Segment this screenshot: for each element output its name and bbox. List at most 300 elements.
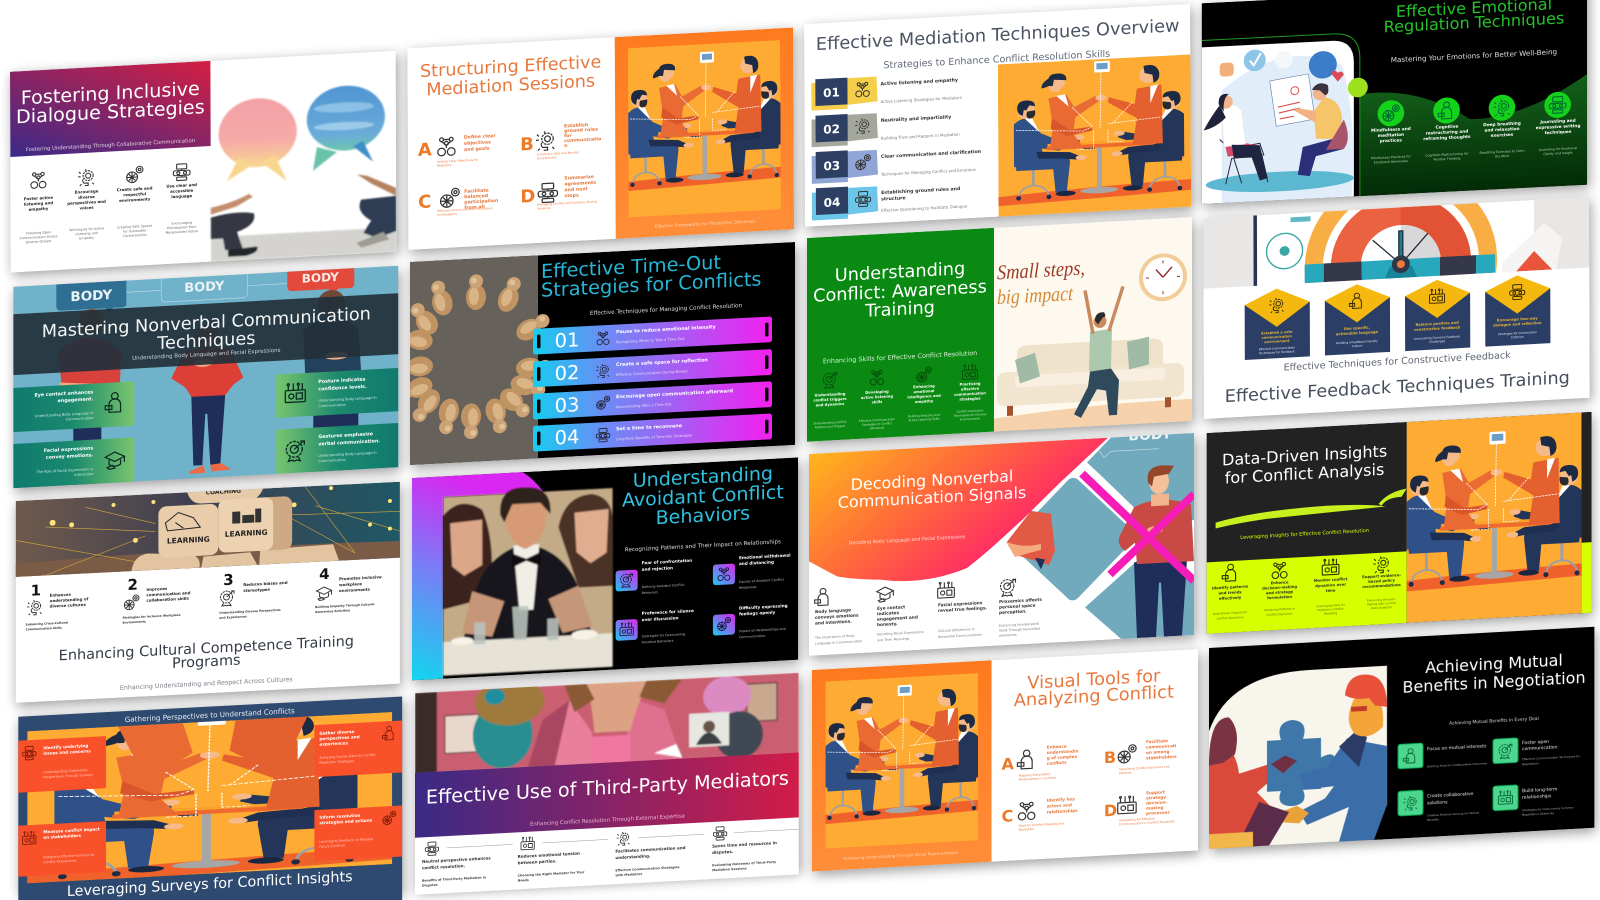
point labels: engagement and (877, 614, 918, 623)
lime brush swoosh (1216, 489, 1407, 529)
callout: eye contact: Communication (66, 416, 93, 421)
icon: summarize (538, 183, 558, 203)
panel: Effective Mediation Techniques Overview (804, 2, 1227, 227)
handwritten slogan (997, 256, 1085, 309)
point details: Conversations (123, 233, 147, 238)
card 3: Balance positive and (1415, 321, 1459, 327)
point details: Mediation Sessions (712, 866, 747, 872)
icon: communication (617, 832, 629, 845)
letter markers: D (520, 186, 535, 208)
letter markers: C (1002, 806, 1013, 826)
point details (20, 220, 198, 245)
point labels: collaboration skills (146, 596, 189, 603)
photo: wooden learning blocks (16, 472, 400, 577)
figure: central man (1119, 464, 1194, 639)
title: Mediation Sessions (426, 72, 595, 100)
point details: Conflict Resolution (957, 408, 984, 414)
point details: Making with Conflict (1367, 601, 1397, 606)
point labels: empathy (29, 206, 49, 212)
point details: Communication Across (20, 234, 58, 240)
callout: inform strategies (314, 805, 402, 861)
subtitle: Achieving Mutual Benefits in Every Deal (1449, 716, 1539, 727)
photo: wooden pawns in a circle (395, 255, 554, 466)
point labels: communication (954, 391, 986, 397)
point labels: emotional (914, 389, 934, 394)
step 03: 03 (823, 159, 840, 173)
point details: Evaluating Outcomes of Third-Party (712, 860, 776, 867)
subtitle: Fostering Understanding Through Collaborative Communication (26, 138, 195, 153)
point labels: Journaling and (1539, 118, 1576, 125)
step bar 02: Effective Communication During Breaks (616, 369, 688, 377)
panel: Effective Time-Out Strategies for Conflicts (395, 242, 795, 466)
point labels: strategy (1146, 794, 1166, 800)
point labels: perspectives and (67, 199, 106, 206)
callout: posture: Posture indicates (318, 377, 366, 385)
title: Training (864, 298, 935, 322)
point labels: Focus on mutual interests (1427, 743, 1487, 753)
card 3: constructive feedback (1414, 325, 1461, 332)
illustration: counselling session (1202, 40, 1354, 204)
figure: right person (303, 288, 361, 472)
callout: posture (276, 368, 398, 418)
point labels (1047, 738, 1177, 821)
speech bubble: BODY middle (161, 268, 247, 302)
point details: Mapping Stakeholder (1019, 772, 1051, 778)
point details: for Vulnerable (123, 228, 146, 234)
icon: perspectives (78, 169, 94, 186)
title: Leveraging Surveys for Conflict Insights (67, 869, 353, 900)
card 4: Strategies for Constructive (1498, 330, 1537, 336)
panel: Fostering Inclusive Dialogue Strategies (10, 51, 396, 273)
icon tile: solutions (1398, 790, 1423, 816)
point labels: Deep breathing (1483, 120, 1521, 128)
point details: Empathy (79, 236, 94, 240)
point details: Positive Thinking (1433, 156, 1460, 162)
point labels: exercises (1491, 132, 1514, 139)
point labels: active listening (861, 394, 893, 400)
point labels: Identify key (1047, 796, 1075, 803)
step details: Building Trust and Rapport in Mediation (881, 132, 960, 141)
step bar 02 (533, 349, 772, 387)
point details: Sessions (537, 206, 551, 211)
title: Visual Tools for (1027, 667, 1161, 694)
photo: wooden learning blocks: LEARNING (167, 535, 210, 546)
icon: strategies (962, 364, 978, 379)
point labels: Promotes inclusive (339, 574, 382, 581)
handwritten slogan: Small steps, (997, 256, 1085, 284)
point labels (422, 840, 777, 870)
point labels: understanding. (615, 853, 651, 860)
point details: Defining Avoidant Conflict (642, 583, 685, 589)
point labels: Difficulty expressing (739, 603, 788, 611)
title: Strategies for Conflicts (541, 267, 761, 302)
header band (10, 61, 211, 157)
card 1: Establish a safe (1261, 330, 1293, 336)
speech bubble: BODY right (287, 260, 354, 298)
icon circle: mindfulness (1378, 100, 1404, 127)
point details: Integrating Art Effective (1119, 816, 1155, 822)
point labels: Reduces emotional tension (518, 851, 580, 859)
title: Effective Mediation Techniques Overview (816, 16, 1180, 55)
icon: proxemics (1000, 579, 1016, 596)
illustration: handshake with puzzle piece (1209, 666, 1387, 849)
illustration: zoomed mediation meeting (0, 700, 433, 889)
point labels: Enhance (1047, 744, 1067, 750)
point labels: Define clear (464, 133, 496, 141)
point labels: g of complex (1047, 754, 1077, 760)
numbers: 3 (223, 571, 234, 589)
point details: Environments (960, 416, 980, 422)
callout: gather perspectives: Analyzing Survey Data for Conflict (319, 753, 376, 760)
teal rounded diamond: centre (1008, 475, 1138, 603)
point labels: conflict resolution. (422, 863, 466, 870)
point labels: Emotional withdrawal (739, 553, 791, 560)
point labels: Saves time and resources in (712, 840, 777, 849)
green outline (1202, 33, 1360, 204)
step 02 (811, 112, 878, 147)
point details (814, 622, 1040, 648)
point labels: personal space (999, 603, 1036, 611)
callout: posture: Communication (318, 403, 346, 408)
point labels: recommendations (1362, 583, 1402, 589)
point details: Environments (122, 620, 146, 625)
callout: inform strategies: strategies and actions (319, 818, 373, 825)
point labels: communication (1522, 744, 1558, 752)
point labels: Reduces biases and (243, 580, 288, 587)
title: Data-Driven Insights (1222, 442, 1387, 469)
illustration: sofa and dancing person (994, 283, 1192, 432)
icon: clear language (173, 164, 190, 181)
letter markers (418, 137, 534, 208)
callout: identify issues: issues and concerns (43, 748, 91, 756)
step details: Effective Questioning to Facilitate Dialogue (881, 203, 968, 213)
panel: Leveraging Surveys for Conflict Insights (0, 695, 433, 900)
point labels: based policy (1368, 578, 1396, 584)
point details: Creating Safe Spaces (117, 224, 153, 230)
card 1: environment (1264, 339, 1290, 344)
point labels: stakeholders (1146, 754, 1177, 760)
callout: gestures: Understanding Body Language in (318, 451, 377, 458)
point details: Strategies for Overcoming Common (1522, 805, 1574, 812)
point details: Active Listening Skills (908, 417, 940, 422)
step labels: Active listening and empathy (881, 77, 958, 87)
title: Understanding (835, 259, 965, 286)
point details: Strategies in Conflict (862, 421, 893, 427)
point labels: communicati (1146, 743, 1177, 750)
step labels: Establishing ground rules and (881, 186, 960, 196)
point details: Responses (739, 585, 757, 590)
speech bubble outline with cropped BODY label (1094, 426, 1173, 458)
icon: objectives (438, 137, 455, 156)
icon: listening (870, 370, 884, 385)
point labels: conflicts (1047, 760, 1067, 766)
icon: listening (31, 172, 46, 189)
point labels: from all (464, 204, 485, 211)
point details: Skills Through Nonverbal (999, 627, 1040, 633)
callout: eye contact (13, 381, 134, 432)
caption: Effective Frameworks for Productive Outcomes (654, 218, 756, 230)
step bar 04: Long-Term Benefits of Time-Out Strategies (616, 433, 692, 441)
point labels (813, 381, 986, 410)
point details: Benefits of Third-Party Mediation in (422, 875, 486, 883)
point labels: Establish (564, 122, 588, 129)
letter markers: A (418, 139, 432, 161)
step labels: Neutrality and impartiality (881, 114, 951, 124)
callout: gather perspectives: experiences (319, 740, 348, 747)
point labels: honesty. (877, 621, 898, 628)
callout: gestures (276, 423, 398, 474)
point details: Creative Problem-Solving for Mutual (1427, 810, 1479, 817)
point details (1018, 764, 1175, 832)
point labels: practices (1380, 137, 1402, 144)
panel: Effective Feedback Techniques Training (1203, 160, 1590, 419)
point details: Setting Clear Objectives for (437, 158, 479, 164)
point details (1213, 597, 1397, 622)
point labels: reframing thoughts (1423, 134, 1471, 142)
point details: Conflict Dynamics (1267, 611, 1293, 617)
figure: centre person (171, 322, 243, 475)
point labels: steps (564, 193, 579, 199)
letter markers: B (1104, 748, 1116, 767)
point details: Awareness (999, 633, 1017, 638)
speech bubble: BODY left (56, 281, 126, 316)
point labels: Facilitates communication and (615, 845, 686, 854)
point details: Building Empathy Through Cultural (315, 602, 374, 609)
point labels: over discussion (642, 615, 678, 622)
icon circle: cognitive (1433, 97, 1460, 124)
numbers: 2 (127, 576, 138, 594)
callout: facial expressions (13, 437, 134, 488)
lime accent (1348, 77, 1368, 98)
point details: Resolution (1019, 827, 1034, 832)
callout: identify issues: Perspectives Through Surveys (43, 773, 93, 779)
point labels: Eye contact (877, 604, 905, 612)
callout: eye contact: Understanding Body Language in (35, 411, 93, 418)
panel: Decoding Nonverbal Communication Signals (809, 425, 1194, 656)
point labels: Enhancing (913, 384, 935, 389)
point labels: understandin (1047, 748, 1078, 755)
callout: inform strategies: Future Conflicts (319, 843, 345, 849)
title: Enhancing Cultural Competence Training (59, 634, 354, 664)
subtitle: Effective Techniques for Constructive Feedback (1284, 350, 1511, 373)
icon: collaboration (124, 595, 139, 610)
point details: Avoidant Behaviors (642, 639, 674, 644)
point details: Communication in Conflict Resolution (1119, 819, 1175, 826)
point labels: Neutral perspective enhances (422, 855, 491, 864)
point labels: for (564, 133, 572, 139)
callout: measure impact: Conflict Assessment (43, 859, 77, 864)
callout: facial expressions: Interaction (74, 472, 93, 477)
step bar 03: Reconnecting After a Time-Out (616, 402, 672, 409)
icon: figures (1018, 802, 1035, 820)
icon: wall clock (1139, 252, 1187, 302)
point labels: Facial expressions (938, 600, 983, 609)
photo: wooden learning blocks: COACHING (206, 488, 241, 496)
panel: Enhancing Cultural Competence Training Programs (16, 472, 400, 703)
step bar 04 (533, 413, 772, 452)
card 2: Culture (1352, 344, 1363, 348)
point labels: environments (339, 587, 371, 593)
illustration: mediation meeting (628, 40, 781, 218)
point labels: environments (119, 196, 151, 203)
point labels: conflict triggers (813, 397, 847, 403)
point labels: and goals (464, 146, 490, 153)
callout: posture: confidence levels. (318, 384, 367, 392)
point labels: voices (79, 205, 94, 211)
figure: left person (58, 307, 121, 486)
handwritten slogan: big impact (997, 281, 1074, 309)
step details (880, 94, 976, 213)
point details: Understanding Conflict (813, 420, 847, 426)
point labels: understanding of (50, 596, 89, 603)
icon: inclusive workplace (317, 587, 332, 601)
point labels: feelings openly (739, 610, 776, 617)
title: Decoding Nonverbal (851, 466, 1013, 494)
point details (422, 860, 776, 888)
teal panel: top right (1087, 433, 1194, 535)
point labels: Summarize (564, 174, 594, 182)
card 3: Challenges (1429, 339, 1446, 344)
step 03 (812, 149, 878, 184)
point labels: on among (1146, 749, 1170, 755)
icon circle: journaling (1544, 91, 1571, 119)
point labels (24, 182, 197, 214)
point details: Negotiation Obstacles (1522, 811, 1554, 817)
point details: Tools for Conflict Mapping and (1018, 821, 1064, 828)
point labels (1212, 573, 1402, 603)
point labels: Developing (865, 390, 889, 395)
panel: Effective Use of Third-Party Mediators (415, 663, 799, 895)
point labels: Foster open (1522, 739, 1549, 746)
card 4: dialogue and reflection (1493, 321, 1542, 328)
point labels: Create safe and (117, 185, 153, 192)
speech bubble: BODY right: BODY (302, 270, 339, 286)
point details: Communication Skills (26, 626, 62, 632)
icon: understanding (27, 600, 41, 615)
photo: woman in pink blazer among decor (415, 663, 799, 776)
point labels: Understanding (815, 392, 846, 398)
dark green wave (1360, 74, 1587, 196)
step bar 03: Encourage open communication afterward (616, 388, 734, 400)
point labels: Facilitate (1146, 738, 1168, 744)
point labels: Enhance (1271, 580, 1289, 585)
point details: Techniques for Diverse (953, 412, 987, 418)
step bar 01 (533, 316, 772, 355)
point labels: reveal true feelings. (938, 605, 988, 614)
point details: Conflict Resolution (1217, 615, 1244, 621)
step 04 (812, 185, 878, 220)
point details: Analyzing Patterns in (1264, 606, 1295, 612)
point labels: and trends (1219, 590, 1242, 596)
point details: Cognitive Restructuring for (1425, 151, 1469, 158)
lime lower band (1207, 551, 1407, 634)
point labels: meditation (1378, 132, 1404, 139)
point labels: Support evidence- (1362, 573, 1402, 579)
point labels: Build long-term (1522, 787, 1558, 794)
point details: Situations (870, 426, 885, 430)
green block (807, 228, 994, 442)
step bar 01: 01 (555, 328, 579, 353)
point labels: intelligence and (907, 394, 941, 400)
point labels: Identify patterns (1212, 585, 1249, 590)
title: Achieving Mutual (1425, 651, 1563, 677)
teal panel: bottom right (1085, 539, 1194, 641)
icon: biases (221, 591, 234, 606)
point details: Marginalized Voices (166, 229, 198, 235)
point labels: language (171, 193, 193, 199)
card 1: Techniques for Feedback (1258, 349, 1295, 355)
point labels: Create collaborative (1427, 791, 1474, 800)
point labels: Support (1146, 789, 1165, 795)
point details: Building Empathy and (908, 413, 940, 418)
title: Structuring Effective (420, 53, 601, 82)
numbers: 4 (319, 565, 330, 583)
point labels: communicatio (564, 136, 601, 144)
point labels: stereotypes (243, 587, 271, 593)
point details: Strategies for Inclusive Workplace (122, 613, 181, 620)
subtitle: Enhancing Skills for Effective Conflict Resolution (823, 349, 977, 365)
point details: Clarity and Insight (1543, 151, 1573, 156)
title band (13, 293, 398, 375)
callout: eye contact: engagement. (58, 396, 93, 404)
icon: safe environments (127, 166, 143, 183)
icon: scroll (425, 842, 439, 856)
point labels: and dynamics (816, 402, 845, 408)
step bar 02: Create a safe space for reflection (616, 357, 708, 368)
point details: Listening and (76, 231, 98, 236)
illustration: mediation meeting (826, 673, 978, 848)
point details: Effective Communication (859, 417, 895, 423)
title: Benefits in Negotiation (1402, 668, 1586, 697)
subtitle: Decoding Body Language and Facial Expressions (849, 534, 966, 546)
photo: wooden learning blocks: LEARNING (225, 528, 268, 539)
speech bubble: BODY middle: BODY (184, 279, 225, 296)
point details: Diverse Groups (26, 239, 52, 244)
orange block (812, 660, 992, 872)
step labels (881, 76, 981, 203)
subtitle: Enhancing Conflict Resolution Through External Expertise (530, 814, 685, 828)
letter markers (1002, 748, 1117, 826)
callout: gather perspectives (314, 720, 402, 777)
point details: Enhancing Decision- (1367, 597, 1396, 603)
illustration: mediation meeting (1406, 412, 1582, 623)
point details: Fostering Open (26, 230, 51, 236)
point labels: making (1146, 805, 1163, 811)
card 2: actionable language (1336, 330, 1379, 336)
point details: Cultural Differences in (938, 627, 975, 633)
callout: posture: Understanding Body Language in (318, 396, 377, 403)
icon: calendar grid (1118, 796, 1136, 814)
point details: Enhancing Cross-Cultural (26, 620, 68, 627)
callout: gestures: Communication (318, 458, 346, 463)
card 1: Effective Communication (1259, 345, 1295, 351)
figure: partial person with red shirt (1006, 510, 1055, 571)
card 2: Building a Feedback-Friendly (1336, 339, 1378, 345)
point labels: listening and (24, 200, 53, 207)
callout: eye contact: Eye contact enhances (35, 389, 93, 399)
point details: Language in Communication (815, 639, 862, 646)
point details: Data-Driven Insights for (1213, 610, 1248, 616)
icon tile: withdrawal (713, 563, 735, 585)
point details: Needs (518, 878, 529, 883)
icon: facial expressions (938, 582, 954, 598)
point details (1371, 146, 1577, 165)
point labels: indicates (877, 610, 900, 617)
point labels: respectful (123, 191, 147, 197)
point labels: Enhances (50, 592, 72, 598)
point labels: Monitor conflict (1314, 577, 1348, 583)
icon tile: fear (616, 570, 638, 592)
